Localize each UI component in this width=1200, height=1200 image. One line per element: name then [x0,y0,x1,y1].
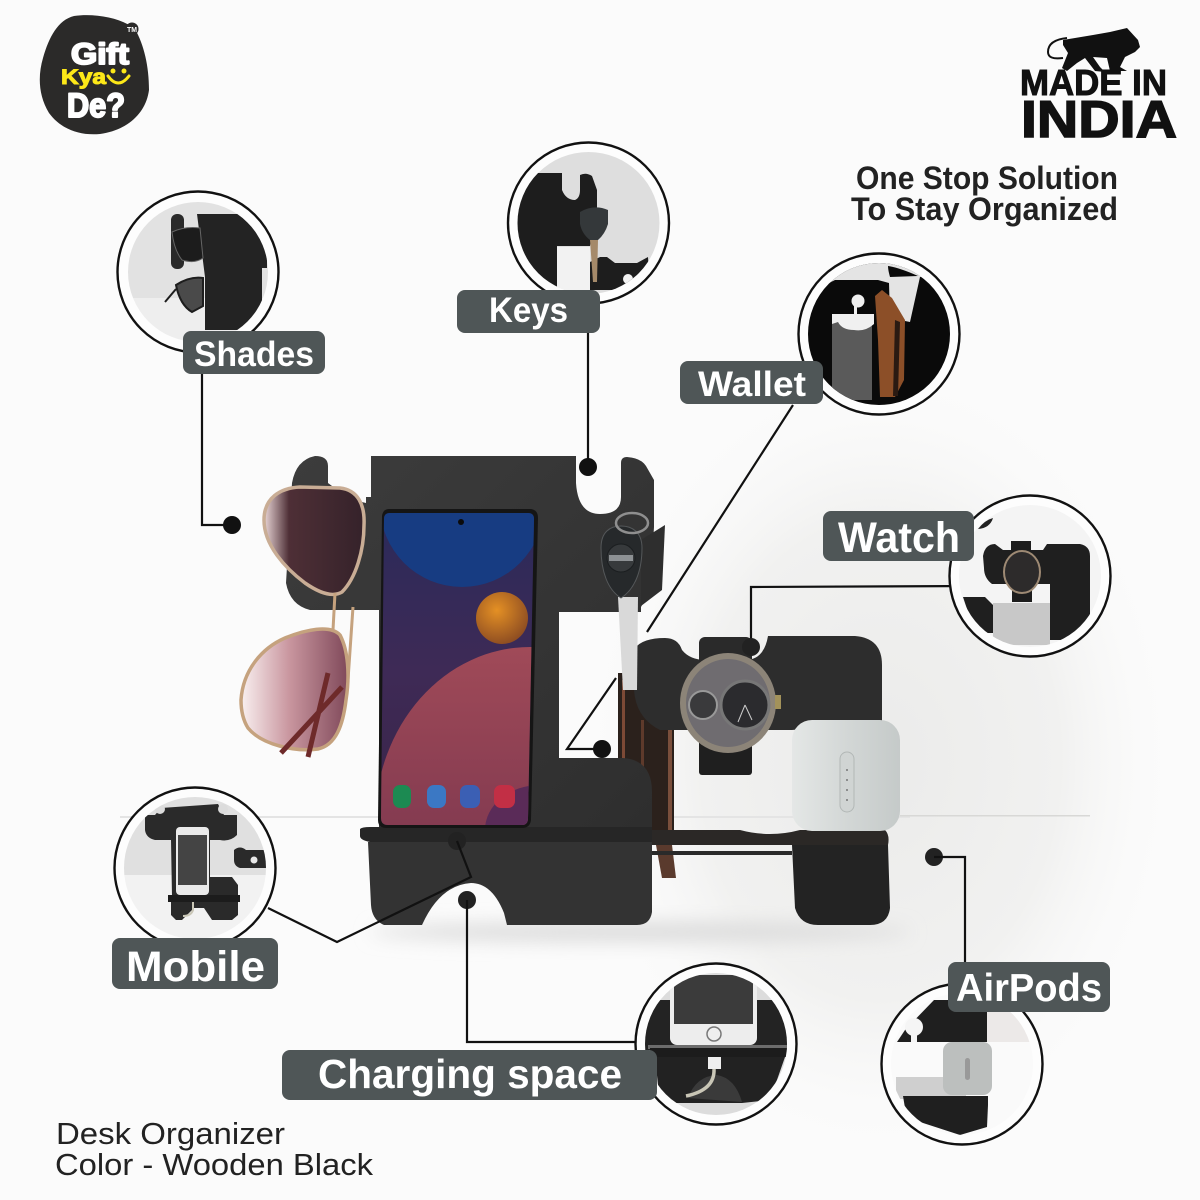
connector: watch [742,586,975,656]
wallet behind stand [618,673,676,878]
label: watch: Watch [838,514,960,562]
shelf [360,827,889,845]
product description: Desk Organizer [56,1116,285,1151]
connector: airpods [925,848,965,965]
callout circle: shades [118,192,280,352]
label: shades: Shades [194,335,314,374]
tagline: One Stop Solution [856,160,1118,196]
tagline: To Stay Organized [851,191,1118,227]
watch [680,637,781,775]
product description [55,1116,374,1182]
logo: Gift Kya De: Kya [61,66,106,89]
callout circle: wallet [798,254,960,414]
label: airpods: AirPods [956,967,1102,1010]
back board [286,456,654,830]
car key [601,513,665,690]
airpods case [792,720,900,831]
logo: Gift Kya De: Gift [71,38,129,71]
label: wallet [680,361,823,404]
product: desk organizer [239,456,900,925]
watch stand panel [632,636,882,730]
connector: keys [579,330,597,476]
connector: wallet [567,405,793,758]
connector: charging space [458,891,640,1042]
label: charging space: Charging space [318,1051,622,1097]
callout circle: mobile [114,788,276,948]
label: wallet: Wallet [698,365,806,404]
callout circle: airpods [882,984,1042,1144]
connector: mobile [268,832,471,942]
logo: Gift Kya De: TM [127,27,137,34]
label: keys: Keys [489,291,568,330]
logo: Gift Kya De [40,15,149,134]
made in india badge: INDIA [1021,91,1177,149]
made in india badge: MADE IN [1020,62,1167,103]
logo: Gift Kya De: De? [67,87,125,125]
callout circle: charging space [636,964,796,1124]
callout circle: watch [950,496,1110,656]
sunglasses [241,487,364,757]
callout circle: keys [508,142,669,304]
made in india badge [1020,28,1177,149]
tagline [851,160,1118,227]
label: keys [457,290,600,333]
right leg [792,845,890,925]
lower base [368,842,652,925]
product description: Color - Wooden Black [55,1147,374,1182]
connector: shades [202,372,241,534]
phone [378,509,538,828]
label: mobile: Mobile [126,943,265,991]
icon: lion [1048,28,1140,72]
